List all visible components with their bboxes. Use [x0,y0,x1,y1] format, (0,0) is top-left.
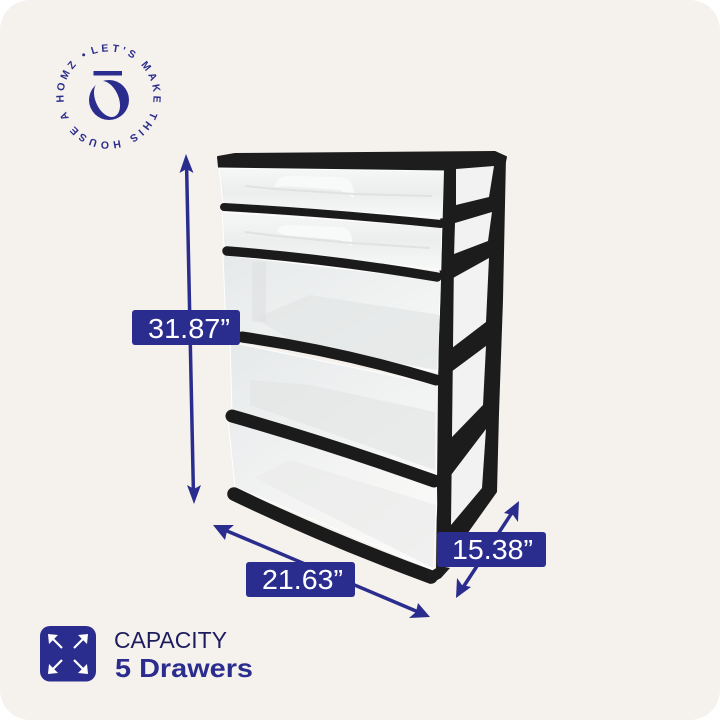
width label: 21.63” [262,564,343,595]
drawer 3 [223,255,441,372]
badge logo [89,71,129,121]
width label [246,562,355,597]
drawer 5 [228,420,438,570]
brand badge [56,44,161,149]
capacity block [40,626,253,683]
drawer 2 [222,212,442,270]
capacity value: 5 Drawers [115,653,253,683]
depth label [437,532,546,567]
product: drawer unit [218,152,506,584]
depth dimension arrow [456,501,519,598]
depth label: 15.38” [452,534,533,565]
icon: expand arrows [40,626,96,682]
front post [437,168,455,572]
side panels [451,166,494,525]
height label [132,310,240,345]
drawer pull bars [224,207,441,577]
frame side [436,157,506,572]
drawer 1 [219,168,444,218]
height label: 31.87” [148,313,230,344]
height dimension arrow [180,154,201,504]
top rail [218,152,506,171]
capacity text: CAPACITY [114,627,227,653]
badge ring text: LET'S MAKE THIS HOUSE A HOMZ • [56,44,161,149]
width dimension arrow [213,525,430,618]
drawer 4 [230,342,438,474]
bottom corner [426,566,450,584]
